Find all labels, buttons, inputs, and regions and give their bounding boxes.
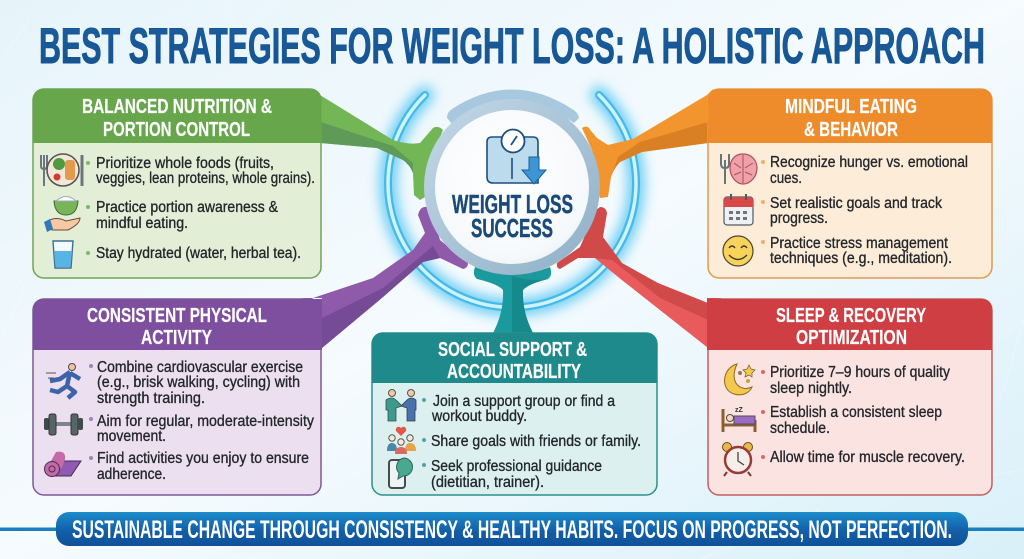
text: list: Establish a consistent sleep <box>770 404 942 421</box>
connector: orange <box>582 89 713 198</box>
text: list: progress. <box>770 210 828 227</box>
heading: SOCIAL SUPPORT & <box>438 338 587 361</box>
heading <box>87 304 267 349</box>
connector: green <box>310 88 443 200</box>
icon: fork and brain <box>721 154 757 184</box>
icon: phone with chat bubble <box>389 458 413 488</box>
text: list <box>761 154 968 267</box>
heading <box>438 338 587 383</box>
text: list: Find activities you enjoy to ensure <box>97 450 309 467</box>
connector: teal <box>474 267 551 333</box>
panel: social support <box>372 333 657 495</box>
text: list: Practice stress management <box>770 235 949 252</box>
text: list: (e.g., brisk walking, cycling) with <box>97 374 300 391</box>
text: list: veggies, lean proteins, whole grains). <box>96 170 315 187</box>
heading: SLEEP & RECOVERY <box>776 304 926 327</box>
text: list <box>89 359 314 483</box>
icon: smiley <box>723 236 753 266</box>
icon: yoga mat <box>44 452 81 476</box>
icon: alarm clock <box>722 442 752 476</box>
heading: CONSISTENT PHYSICAL <box>87 304 267 327</box>
icon: bed <box>723 407 755 432</box>
text: list: Seek professional guidance <box>431 458 602 475</box>
text: list: adherence. <box>97 466 166 483</box>
icon: runner <box>46 364 80 398</box>
heading: ACTIVITY <box>141 326 212 349</box>
heading: PORTION CONTROL <box>103 118 250 141</box>
text: list: techniques (e.g., meditation). <box>770 250 952 267</box>
text: list: (dietitian, trainer). <box>431 474 544 491</box>
text: list <box>86 155 315 262</box>
icon: calendar <box>724 194 753 225</box>
heading <box>785 95 917 141</box>
icon: glass of water <box>53 241 73 268</box>
hub text: SUCCESS <box>471 213 553 243</box>
text: list: movement. <box>97 428 166 445</box>
heading: MINDFUL EATING <box>785 95 917 118</box>
text: list: Allow time for muscle recovery. <box>770 449 965 466</box>
panel: physical activity <box>33 299 322 495</box>
text: list: Join a support group or find a <box>433 393 615 410</box>
heading: OPTIMIZATION <box>796 326 907 349</box>
hub text: WEIGHT LOSS <box>452 189 573 219</box>
heading: BALANCED NUTRITION & <box>82 95 272 118</box>
text: list: Aim for regular, moderate-intensity <box>97 413 314 430</box>
icon: plate and cutlery <box>41 154 82 186</box>
heading: & BEHAVIOR <box>804 118 898 141</box>
hub text <box>452 189 573 243</box>
text: list: Prioritize 7–9 hours of quality <box>770 364 950 381</box>
connector: red <box>557 207 722 347</box>
panel: sleep and recovery <box>707 299 992 495</box>
icon: scale with down arrow <box>487 130 546 184</box>
text: list: mindful eating. <box>96 215 188 232</box>
text: list <box>761 364 965 466</box>
heading <box>776 304 926 349</box>
text: list: workout buddy. <box>431 408 527 425</box>
heading <box>82 95 272 141</box>
text: list <box>422 393 641 491</box>
icon: group with heart <box>387 427 416 454</box>
text: list: schedule. <box>770 420 830 437</box>
text: list: Share goals with friends or family. <box>431 433 641 450</box>
text: list: strength training. <box>97 390 205 407</box>
neon ring <box>388 95 636 307</box>
icon: dumbbell <box>44 414 83 435</box>
text: list: Practice portion awareness & <box>96 199 279 216</box>
connector: purple <box>300 207 468 348</box>
text: list: Recognize hunger vs. emotional <box>770 154 968 171</box>
panel: balanced nutrition <box>33 89 321 278</box>
text: list: cues. <box>770 170 802 187</box>
hub: weight loss success <box>424 90 600 275</box>
icon: handshake <box>386 390 416 421</box>
panel: mindful eating <box>708 89 992 278</box>
icon: moon and stars <box>725 364 755 395</box>
icon: bed: zZ <box>735 407 744 414</box>
text: list: Set realistic goals and track <box>770 195 942 212</box>
text: list: Combine cardiovascular exercise <box>97 359 303 376</box>
heading: ACCOUNTABILITY <box>447 360 581 383</box>
text: list: Stay hydrated (water, herbal tea). <box>96 245 301 262</box>
text: list: sleep nightly. <box>770 380 852 397</box>
text: list: Prioritize whole foods (fruits, <box>96 155 274 172</box>
icon: bowl on hand <box>44 196 80 232</box>
